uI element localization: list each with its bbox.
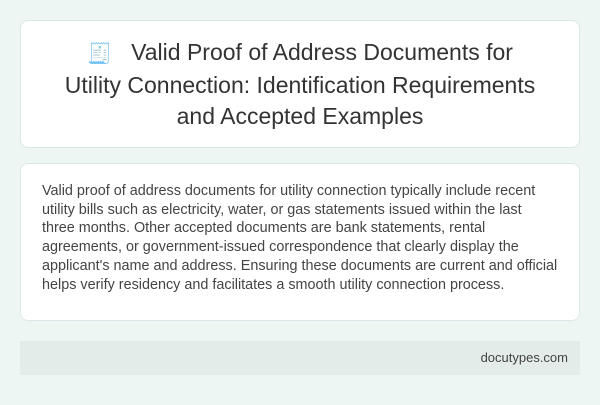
description text: helps verify residency and facilitates a smooth utility connection process.: [42, 277, 504, 293]
description text: applicant's name and address. Ensuring these documents are current and official: [42, 258, 557, 274]
description text: three months. Other accepted documents are bank statements, rental: [42, 220, 485, 236]
title: Utility Connection: Identification Requirements: [65, 72, 535, 98]
title: and Accepted Examples: [177, 102, 423, 128]
title card: [20, 20, 580, 148]
title: 🧾 Valid Proof of Address Documents for: [87, 38, 513, 64]
description text: Valid proof of address documents for utility connection typically include recent: [42, 183, 535, 199]
description text: [42, 183, 557, 293]
footer: docutypes.com: [481, 350, 568, 365]
title: [65, 38, 535, 129]
description text: utility bills such as electricity, water, or gas statements issued within the last: [42, 202, 522, 218]
description text: agreements, or government-issued correspondence that clearly display the: [42, 239, 519, 255]
footer: [20, 341, 580, 375]
description card: [20, 163, 580, 321]
